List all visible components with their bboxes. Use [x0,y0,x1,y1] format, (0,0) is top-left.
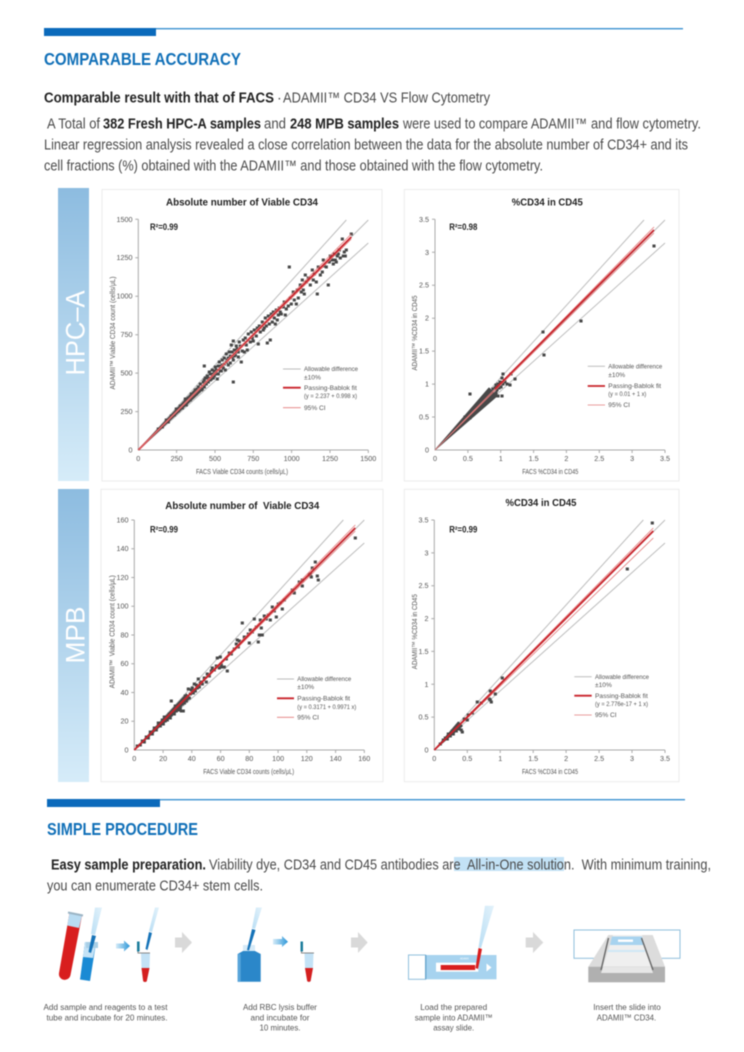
y axis tick labels: 3.5 [418,516,428,524]
y axis tick labels: 3 [425,248,429,257]
y axis tick labels [418,516,428,754]
intro paragraph: and flow cytometry. [591,116,701,132]
y axis title: ADAMII™ %CD34 in CD45 [410,296,419,370]
y axis tick labels: 80 [120,630,128,640]
x axis tick labels: 0.5 [463,454,473,463]
panel: HPC-A absolute number scatter chart [102,190,382,481]
step 3 illustration: assay slide: ADAMII [460,958,469,960]
legend: ±10% [297,684,314,691]
y axis tick labels: 2.5 [418,581,428,590]
r squared: R²=0.99 [150,222,178,232]
y axis tick labels: 3 [424,548,428,557]
intro paragraph [44,116,701,174]
x axis tick labels: 40 [188,754,196,763]
x axis tick labels: 1 [499,454,503,463]
y axis tick labels [419,215,429,454]
procedure paragraph with highlight: Easy sample preparation. [51,858,206,874]
subheading: comparable result: Comparable result with that of FACS [44,90,274,106]
caption: step 2: 10 minutes. [260,1022,300,1032]
y axis tick labels: 0 [425,446,429,454]
caption: step 3: sample into ADAMII™ [415,1012,493,1022]
y axis title: ADAMII™ %CD34 in CD45 [410,594,419,669]
x axis tick labels: 0 [136,454,140,463]
intro paragraph: A Total of [47,116,101,132]
legend: ±10% [608,372,625,379]
y axis tick labels: 3.5 [419,215,429,224]
y axis tick labels: 1500 [116,215,132,224]
red sample tube [59,912,83,980]
x axis tick labels: 0 [433,454,437,463]
caption: step 3: Load the prepared [420,1002,487,1012]
heading: simple procedure: SIMPLE PROCEDURE [47,819,198,839]
y axis tick labels: 2.5 [419,281,429,290]
r squared: R²=0.99 [150,524,178,534]
y axis tick labels [116,516,128,754]
y axis title: ADAMII™ Viable CD34 count (cells/μL) [108,276,117,390]
step 3 illustration: assay slide [408,906,496,979]
grey flow arrow 2 [351,932,368,953]
y axis tick labels: 0.5 [418,713,428,722]
caption: step 3: assay slide. [433,1022,474,1032]
subheading: comparable result: · [277,90,282,106]
legend: Passing-Bablok fit [608,383,661,390]
x axis tick labels: 140 [330,754,342,763]
pipette into microtube [149,908,159,932]
step 1 illustration: tubes and pipettes [59,908,159,982]
side label: MPB [58,489,90,782]
legend: (y = 2.237 + 0.998 x) [304,393,357,400]
panel: MPB absolute number scatter chart [101,489,383,782]
x axis tick labels: 60 [217,754,225,763]
legend: 95% CI [595,712,617,719]
y axis tick labels: 100 [116,602,128,611]
intro paragraph: cell fractions (%) obtained with the ADAMII™ and those obtained with the flow cytometry. [44,158,543,174]
y axis tick labels: 1 [424,680,428,689]
step 4 illustration: instrument [574,930,680,982]
y axis tick labels: 160 [116,516,128,524]
legend: ±10% [304,374,321,382]
intro paragraph: 382 Fresh HPC-A samples [103,116,261,132]
x axis tick labels: 0 [132,754,136,763]
x axis tick labels: 1.5 [528,754,538,763]
y axis tick labels: 2 [425,314,429,323]
x axis tick labels [432,754,670,763]
x axis tick labels [132,754,370,763]
legend: Passing-Bablok fit [304,385,357,392]
intro paragraph: and [264,116,286,132]
x axis tick labels: 100 [272,754,284,763]
x axis tick labels: 2 [564,754,568,763]
side label: HPC-A: HPC–A [60,290,90,376]
blue reagent tube [80,942,98,981]
legend: Allowable difference [595,674,649,681]
x axis tick labels: 20 [159,754,167,763]
y axis tick labels: 1 [425,380,429,389]
y axis tick labels: 120 [116,573,128,582]
x axis tick labels: 1 [498,754,502,763]
legend: Allowable difference [608,364,663,370]
panel: HPC-A percent CD34 scatter chart [404,190,679,481]
legend [588,364,663,409]
y axis tick labels: 750 [120,330,132,339]
procedure paragraph with highlight [47,857,711,894]
y axis tick labels: 1.5 [419,347,429,356]
y axis tick labels: 40 [120,688,128,697]
y axis tick labels: 0.5 [419,412,429,422]
chart title: Absolute number of Viable CD34 [166,196,318,208]
y axis tick labels: 0 [128,446,132,454]
x axis title: FACS Viable CD34 counts (cells/μL) [203,767,294,776]
procedure paragraph with highlight: you can enumerate CD34+ stem cells. [47,878,263,894]
r squared: R²=0.98 [449,222,477,232]
caption: step 2: and incubate for [250,1012,310,1022]
caption: step 2 [243,1002,317,1032]
x axis tick labels: 0 [432,754,436,763]
x axis tick labels: 1000 [284,454,300,463]
legend: Passing-Bablok fit [297,696,350,702]
panel: MPB percent CD34 scatter chart [404,489,679,782]
x axis tick labels: 2.5 [594,754,604,763]
caption: step 2: Add RBC lysis buffer [243,1002,317,1012]
x axis tick labels [433,454,670,463]
step 2 illustration: lysis buffer [238,908,314,982]
arrow [116,940,130,952]
legend: (y = 2.776e-17 + 1 x) [595,701,648,708]
chart title: Absolute number of Viable CD34 [165,500,319,512]
x axis tick labels: 500 [209,454,221,463]
x axis title: FACS %CD34 in CD45 [522,467,578,476]
x axis tick labels: 160 [358,754,370,763]
arrow [273,936,288,947]
y axis tick labels: 250 [120,407,132,416]
caption: step 4: Insert the slide into [593,1002,661,1012]
legend: ±10% [595,682,612,689]
x axis tick labels: 250 [171,454,183,463]
legend: Passing-Bablok fit [595,693,648,700]
x axis tick labels: 2 [564,454,568,463]
chart title: %CD34 in CD45 [512,196,583,208]
x axis tick labels: 0.5 [462,754,472,763]
caption: step 1 [44,1002,168,1022]
heading: comparable accuracy: COMPARABLE ACCURACY [44,49,241,69]
x axis tick labels: 3.5 [660,754,670,763]
legend: (y = 0.01 + 1 x) [608,391,646,398]
y axis tick labels: 140 [116,544,128,553]
y axis tick labels: 1250 [116,253,132,262]
x axis tick labels: 1500 [360,454,376,463]
grey flow arrow 3 [526,932,543,953]
legend: (y = 0.3171 + 0.9971 x) [297,704,356,711]
legend [283,366,358,412]
y axis tick labels [116,215,132,454]
y axis tick labels: 60 [120,659,128,668]
x axis tick labels: 120 [301,754,313,763]
subheading: comparable result: ADAMII™ CD34 VS Flow Cytometry [283,90,491,106]
x axis tick labels: 1250 [322,454,338,463]
x axis title: FACS %CD34 in CD45 [522,767,578,776]
plot [135,219,368,453]
slide [408,955,426,979]
intro paragraph: were used to compare ADAMII™ [402,116,587,132]
r squared: R²=0.99 [449,524,477,534]
legend [574,674,649,719]
y axis tick labels: 0 [424,746,428,754]
grey flow arrow 1 [175,932,192,953]
section rule: simple procedure [47,799,685,807]
plot [432,219,665,453]
y axis tick labels: 2 [424,614,428,623]
x axis tick labels: 3 [630,754,634,763]
legend: 95% CI [297,714,319,722]
legend: Allowable difference [304,366,358,373]
caption: step 3 [415,1002,493,1032]
plot [431,520,665,753]
subheading: comparable result [44,90,491,106]
legend: 95% CI [304,405,326,412]
x axis tick labels: 3.5 [660,454,670,463]
microtube with cap [137,942,150,982]
caption: step 4: ADAMII™ CD34. [597,1012,656,1022]
y axis tick labels: 20 [120,717,128,726]
y axis tick labels: 1.5 [418,647,428,656]
x axis tick labels: 750 [247,454,259,463]
side label: HPC-A [58,188,90,481]
pipette into blue tube [91,908,102,935]
pipette [252,908,262,929]
pipette tip [247,929,256,950]
y axis tick labels: 0 [124,746,128,754]
section rule: comparable accuracy [44,28,683,36]
x axis tick labels: 1.5 [529,454,539,463]
x axis tick labels [136,454,376,463]
pipette [478,906,494,948]
caption: step 1: Add sample and reagents to a test [44,1002,168,1012]
x axis tick labels: 2.5 [594,454,604,463]
legend: 95% CI [608,402,630,409]
plot [131,520,364,753]
legend: Allowable difference [297,676,352,683]
chart title: %CD34 in CD45 [506,497,577,509]
bottle [238,945,261,982]
x axis tick labels: 3 [630,454,634,463]
microtube with cap [300,942,314,982]
y axis tick labels: 1000 [116,292,132,301]
x axis title: FACS Viable CD34 counts (cells/μL) [196,467,288,476]
side label: MPB: MPB [60,606,90,664]
y axis title: ADAMII™ Viable CD34 count (cells/μL) [108,575,116,688]
caption: step 4 [593,1002,661,1022]
legend [277,676,356,722]
x axis tick labels: 80 [245,754,253,763]
y axis tick labels: 500 [120,369,132,378]
intro paragraph: 248 MPB samples [290,116,399,132]
caption: step 1: tube and incubate for 20 minutes. [46,1012,168,1022]
